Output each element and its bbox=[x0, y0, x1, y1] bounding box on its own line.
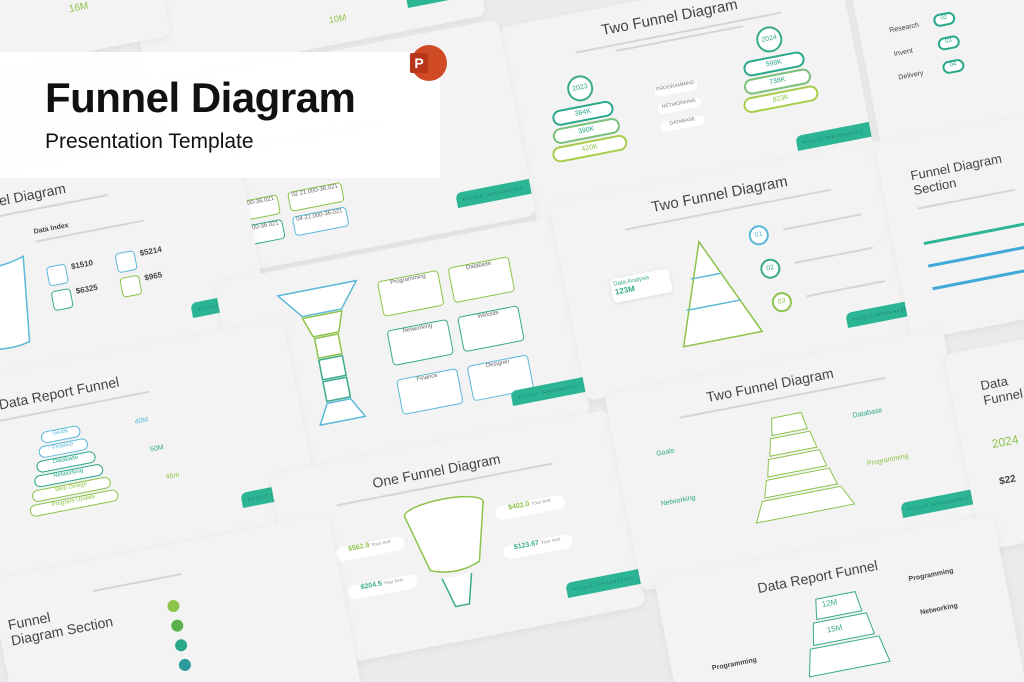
slide: two funnel diagram middle: PUZZLE INFOGRAPHIC bbox=[852, 305, 914, 322]
slide: funnel diagram data index: $5214 bbox=[139, 245, 163, 258]
slide: funnel diagram data index: PUZZLE INFOGRAPHIC bbox=[197, 295, 259, 312]
title banner bbox=[0, 52, 440, 178]
slide: stage funnel diagram: Website bbox=[477, 310, 499, 320]
slide: funnel diagram data index: Data Index bbox=[33, 222, 69, 236]
slide: two funnel diagram lower: Programming bbox=[867, 453, 909, 468]
slide: data report funnel left: Database bbox=[52, 455, 79, 465]
slide: two funnel diagram middle: 03 bbox=[777, 297, 786, 306]
slide: stage funnel diagram: Stage Funnel Diagram bbox=[267, 328, 304, 448]
slide: top left (partially visible) bbox=[0, 0, 171, 101]
slide: top right steps: Invent bbox=[893, 47, 913, 58]
slide: data funnel right: Funnel bbox=[982, 386, 1024, 408]
subtitle: Presentation Template bbox=[45, 130, 254, 153]
slide: two funnel diagram top: PROGRAMMING bbox=[656, 80, 695, 93]
slide: stage funnel diagram: Designer bbox=[485, 359, 510, 369]
slide: funnel diagram data index bbox=[0, 129, 271, 391]
slide: data report funnel lower: 15M bbox=[826, 623, 843, 635]
slide: data funnel right bbox=[944, 289, 1024, 551]
slide: data report funnel left: Goals bbox=[52, 428, 69, 437]
slide: two funnel diagram top bbox=[499, 0, 876, 224]
slide: funnel diagram data index: $1510 bbox=[70, 258, 94, 271]
slide: stage funnel diagram: Database bbox=[466, 261, 492, 271]
slide: funnel diagram section (behind title): 01 21.000-36.021 bbox=[227, 196, 275, 211]
slide: top right steps: 03 bbox=[945, 38, 952, 45]
slide: funnel diagram section right bbox=[874, 79, 1024, 341]
slide: data report funnel left: 45m bbox=[165, 472, 180, 481]
slide: data report funnel lower bbox=[654, 514, 1024, 682]
slide: data funnel right: Data bbox=[979, 373, 1009, 393]
slide: funnel diagram data index: $965 bbox=[144, 270, 163, 282]
slide: one funnel diagram: PUZZLE INFOGRAPHIC bbox=[572, 575, 634, 592]
slide: one funnel diagram: $402.0 Your text bbox=[508, 498, 551, 512]
slide: data report funnel lower: Programming bbox=[908, 568, 954, 583]
slide: stage funnel diagram: Programming bbox=[390, 273, 426, 286]
slide: two funnel diagram lower: Goals bbox=[656, 447, 675, 458]
slide: top left (partially visible): 16M bbox=[68, 1, 89, 15]
slide: funnel diagram section right: Funnel Diagram Section bbox=[909, 151, 1003, 198]
slide: funnel diagram section (behind title): 03 21.000-36.021 bbox=[232, 221, 279, 235]
slide: two funnel diagram top: 598K bbox=[765, 58, 783, 68]
slide: funnel diagram section lower left bbox=[0, 514, 366, 682]
slide: two funnel diagram lower: Networking bbox=[660, 494, 696, 508]
slide: top middle (partially visible): 10M bbox=[328, 12, 347, 25]
slide: stage funnel diagram bbox=[214, 217, 591, 479]
slide: two funnel diagram middle bbox=[549, 139, 926, 401]
slide: funnel diagram section (behind title): 04 21.000-36.021 bbox=[296, 208, 343, 223]
slide: data report funnel left: Program Update bbox=[51, 494, 96, 508]
slide: funnel diagram section lower left: Funnel bbox=[7, 609, 52, 633]
slide: two funnel diagram middle: 02 bbox=[766, 264, 775, 272]
slide: two funnel diagram middle: Data Analysis bbox=[613, 275, 650, 288]
slide: top right steps: Research bbox=[889, 22, 920, 34]
slide: two funnel diagram top: DATABASE bbox=[669, 116, 696, 127]
slide: data report funnel left: Web Design bbox=[54, 481, 88, 493]
slide: data report funnel left: Networking bbox=[53, 468, 84, 479]
slide: one funnel diagram bbox=[269, 409, 646, 671]
slide: two funnel diagram top: 2024 bbox=[761, 34, 777, 44]
slide: two funnel diagram top: 738K bbox=[769, 76, 786, 86]
slide: funnel diagram section (behind title) bbox=[159, 19, 536, 281]
slide: top right steps: Delivery bbox=[898, 70, 924, 82]
slide: top right steps: 04 bbox=[949, 61, 957, 69]
slide: data report funnel lower: Networking bbox=[920, 602, 958, 616]
slide: data report funnel left: 50M bbox=[150, 444, 164, 454]
slide: two funnel diagram top: 420K bbox=[581, 143, 598, 153]
slide: one funnel diagram: One Funnel Diagram bbox=[371, 451, 502, 491]
slide: one funnel diagram: $204.5 Your text bbox=[360, 577, 404, 591]
slide: data report funnel lower: Programming bbox=[711, 657, 757, 672]
slide: data funnel right: $22 bbox=[998, 473, 1017, 487]
slide: data funnel right: 2024 bbox=[991, 432, 1020, 451]
slide: funnel diagram data index: $6325 bbox=[75, 283, 99, 296]
slide: stage funnel diagram: PUZZLE INFOGRAPHIC bbox=[517, 383, 579, 400]
slide: stage funnel diagram: Networking bbox=[402, 323, 433, 335]
slide: two funnel diagram middle: 123M bbox=[614, 284, 636, 297]
slide: funnel diagram section (behind title): Funnel Diagram Section bbox=[212, 113, 383, 163]
slide: funnel diagram section (behind title): 02 21.000-36.021 bbox=[291, 184, 338, 198]
title: Funnel Diagram bbox=[45, 74, 355, 121]
slide: two funnel diagram lower bbox=[604, 329, 981, 591]
slide: top right steps bbox=[844, 0, 1024, 151]
slide: two funnel diagram top: 390K bbox=[578, 126, 595, 135]
slide: two funnel diagram top: 823K bbox=[772, 94, 790, 104]
slide: top middle (partially visible) bbox=[109, 0, 486, 81]
slide: two funnel diagram lower: Database bbox=[852, 407, 883, 420]
slide: one funnel diagram: $123.67 Your text bbox=[513, 536, 561, 551]
slide: two funnel diagram middle: Two Funnel Diagram bbox=[650, 173, 789, 216]
slide: two funnel diagram lower: PUZZLE INFOGRAPHIC bbox=[907, 495, 969, 512]
icon: powerpoint logo bbox=[411, 45, 447, 81]
slide: data report funnel left: 40M bbox=[134, 417, 149, 426]
slide: two funnel diagram middle: 01 bbox=[754, 231, 763, 239]
slide: data report funnel left: PUZZLE INFOGRAPHIC bbox=[247, 485, 309, 502]
slide: data report funnel left: Data Report Funnel bbox=[0, 373, 120, 413]
slide: two funnel diagram top: 384K bbox=[574, 108, 592, 118]
slide: two funnel diagram top: NETWORKING bbox=[661, 98, 696, 110]
slide: top right steps: 02 bbox=[940, 14, 948, 21]
slide: funnel diagram section (behind title): PUZZLE INFOGRAPHIC bbox=[462, 185, 524, 202]
slide: two funnel diagram lower: Two Funnel Diagram bbox=[705, 365, 835, 405]
slide: two funnel diagram top: 2023 bbox=[572, 83, 588, 93]
slide: data report funnel left: Finance bbox=[52, 441, 74, 451]
slide: data report funnel lower: Data Report Funnel bbox=[756, 557, 879, 596]
slide: stage funnel diagram: Finance bbox=[416, 373, 438, 383]
icon: powerpoint logo: P bbox=[414, 55, 424, 71]
slide: data report funnel lower: 12M bbox=[821, 597, 838, 609]
slide: one funnel diagram: $562.9 Your text bbox=[348, 539, 391, 553]
slide: funnel diagram section lower left: Diagram Section bbox=[10, 613, 114, 649]
slide: data report funnel left bbox=[0, 319, 321, 581]
slide: two funnel diagram top: PUZZLE INFOGRAPHIC bbox=[802, 128, 864, 145]
